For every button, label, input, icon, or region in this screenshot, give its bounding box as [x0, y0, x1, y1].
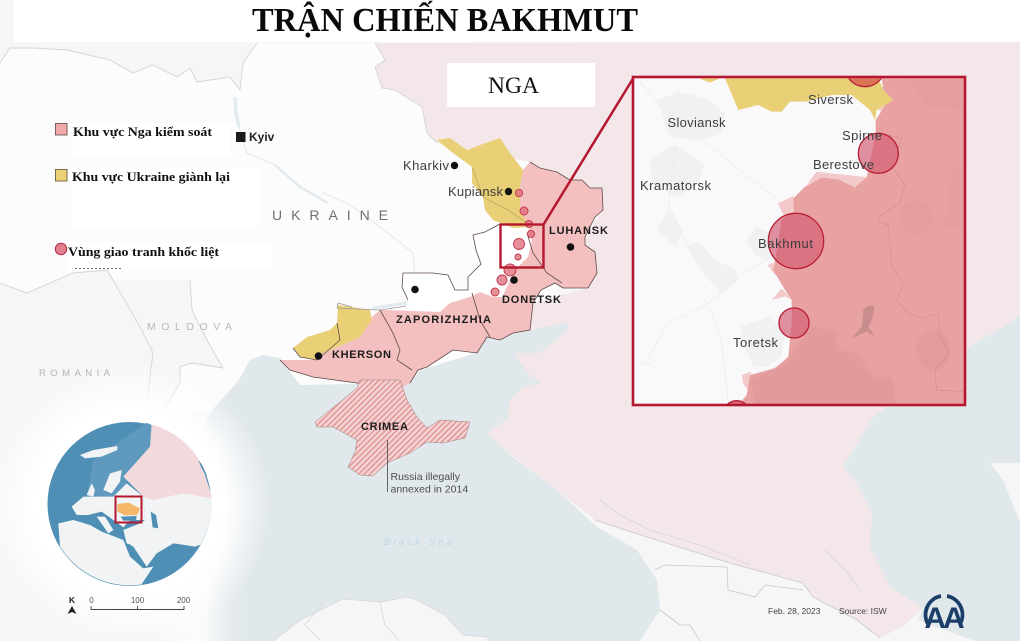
- Donetsk: [502, 276, 562, 306]
- scale bar: 0: [89, 596, 94, 605]
- sea fade near globe, upper part: [170, 435, 218, 560]
- Ukraine reclaimed area north: [437, 138, 530, 228]
- Russian-controlled area: [280, 162, 603, 390]
- globe Red Sea and Persian Gulf: [128, 544, 142, 568]
- inset city labels: Sloviansk: [668, 115, 726, 130]
- inset marker: Spirne: [858, 133, 898, 173]
- Caspian Sea: [843, 315, 1020, 641]
- date: Feb. 28, 2023: [768, 606, 821, 616]
- label: Moldova: MOLDOVA: [147, 321, 232, 333]
- inset roads: [635, 80, 778, 403]
- Turkey borders: [273, 597, 487, 641]
- Crimea: [315, 380, 470, 476]
- inset city labels: Spirne: [842, 128, 882, 143]
- Donetsk: DONETSK: [502, 294, 562, 306]
- Belarus Moldova Romania borders: [0, 43, 437, 410]
- globe glow: [0, 354, 290, 641]
- connector line to inset: [544, 77, 634, 224]
- inset marker: Toretsk: [779, 308, 809, 338]
- globe Caspian Sea: [151, 512, 158, 528]
- Luhansk: LUHANSK: [549, 225, 609, 237]
- Russia territory: [375, 42, 1020, 638]
- legend: fierce fighting zones: Vùng giao tranh khốc liệt: [68, 244, 220, 259]
- logo: AA: AA: [924, 602, 964, 635]
- Crimea annotation: annexed in 2014: [390, 484, 468, 496]
- legend: Ukraine reclaimed: Khu vực Ukraine giành lại: [72, 169, 230, 184]
- inset city labels: Toretsk: [733, 335, 778, 350]
- Black Sea and Sea of Azov: [207, 322, 660, 641]
- Kharkiv: Kharkiv: [403, 158, 450, 173]
- Ukraine territory: [0, 43, 560, 413]
- source: Source: ISW: [839, 606, 887, 616]
- inset reclaimed area: [725, 78, 893, 120]
- South Caucasus borders and relief: [595, 500, 880, 641]
- inset panel: Bakhmut detail: [634, 78, 964, 404]
- inset darker patches: [767, 364, 779, 370]
- label: Zaporizhzhia: ZAPORIZHZHIA: [396, 314, 492, 326]
- locator box on main map: [500, 224, 544, 268]
- scale bar: 100: [131, 596, 145, 605]
- globe Arctic rim: [198, 460, 208, 477]
- inset marker: north: [848, 78, 882, 88]
- locator globe: [48, 420, 213, 588]
- label: Ukraine: UKRAINE: [272, 207, 388, 223]
- scale bar: [89, 596, 191, 610]
- label: Russia box: [447, 63, 595, 107]
- Kyiv marker: Kyiv: [249, 130, 275, 144]
- legend: Russian control: Khu vực Nga kiểm soát: [73, 124, 213, 139]
- inset Russian-controlled area: [738, 78, 965, 405]
- Kherson: KHERSON: [332, 349, 392, 361]
- globe lighter northern ocean: [87, 420, 153, 497]
- inset marker: Bakhmut: [768, 213, 824, 269]
- Luhansk: [549, 225, 609, 251]
- inset frame: [633, 77, 965, 405]
- label: Russia box: NGA: [488, 73, 539, 99]
- inset city labels: Bakhmut: [758, 236, 813, 251]
- globe Russia: [123, 423, 213, 500]
- north arrow: [68, 595, 76, 614]
- title: TRẬN CHIẾN BAKHMUT: [252, 0, 638, 39]
- Kupiansk: Kupiansk: [448, 184, 504, 199]
- Kazakhstan shore: [970, 463, 1020, 522]
- globe Ukraine highlight: [117, 503, 140, 515]
- inset lake: [852, 306, 875, 338]
- Zaporizhzhia city dot: [411, 286, 419, 293]
- north arrow: K: [69, 595, 76, 605]
- inset marker: south: [727, 400, 746, 404]
- label: Black Sea: Black Sea: [384, 537, 452, 548]
- inset city areas: [650, 92, 785, 367]
- label: Crimea: CRIMEA: [361, 421, 409, 433]
- inset reclaimed area corner: [699, 78, 720, 83]
- Crimea annotation: [388, 440, 468, 496]
- Kyiv marker: [236, 130, 275, 144]
- fighting markers on main map: [491, 189, 535, 296]
- Crimea annotation: Russia illegally: [390, 471, 461, 483]
- inset city labels: Siversk: [808, 92, 854, 107]
- title band: [14, 0, 1020, 42]
- legend masks: [67, 123, 273, 269]
- scale bar: 200: [177, 596, 191, 605]
- globe Black Sea: [121, 516, 137, 521]
- Ukraine reclaimed area Kherson: [293, 305, 372, 360]
- label: Romania: ROMANIA: [39, 368, 111, 379]
- inset light contested strips: [742, 86, 896, 392]
- globe Africa and Asia land: [58, 446, 213, 588]
- white area of Zaporizhzhia and Donetsk oblasts: [402, 224, 532, 312]
- sea fade near globe, lower part: [170, 520, 218, 641]
- inset city labels: Kramatorsk: [640, 178, 712, 193]
- inset oblast boundary: [878, 135, 965, 392]
- Dnipro river: [235, 97, 417, 308]
- oblast boundaries: [280, 162, 603, 390]
- inset city labels: [640, 92, 882, 350]
- inset city labels: Berestove: [813, 157, 874, 172]
